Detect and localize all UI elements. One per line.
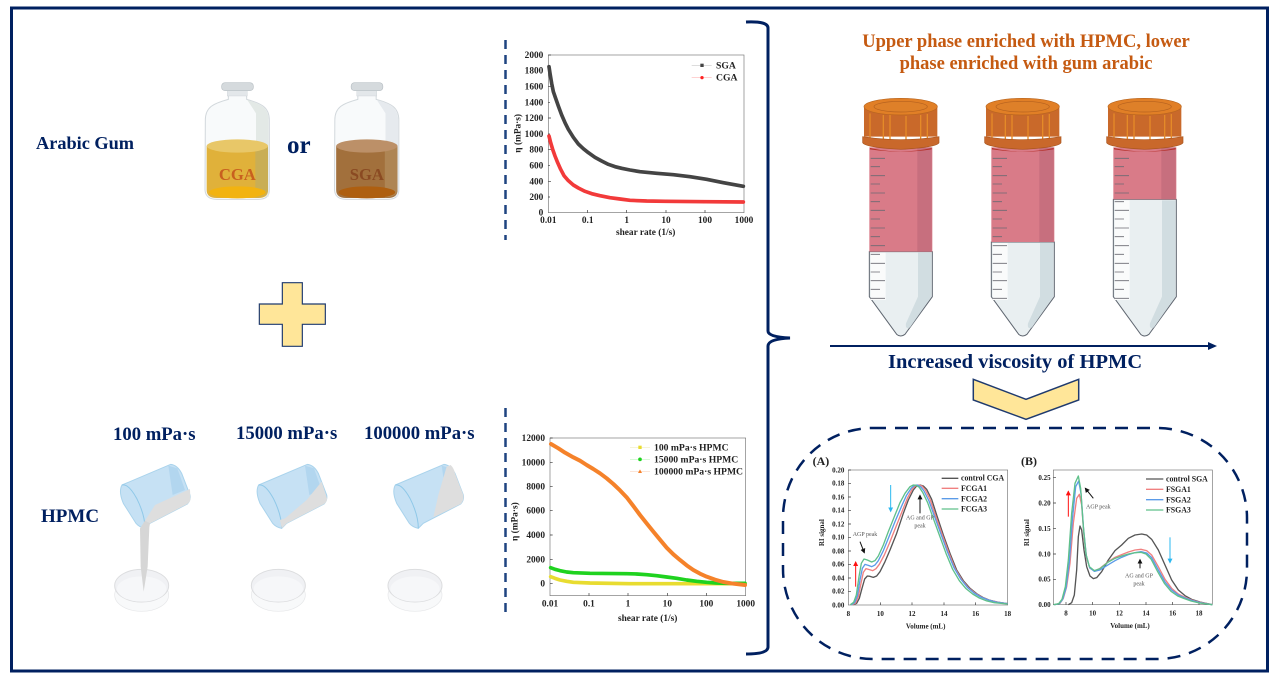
dashed divider top <box>504 40 507 240</box>
icon: CGA bottle <box>205 83 269 199</box>
chart B: SGA RI signal: control SGA <box>1166 475 1208 484</box>
chart A: CGA RI signal: FCGA1 <box>961 484 987 493</box>
chart B: SGA RI signal: RI signal <box>1023 519 1031 546</box>
chart A: CGA RI signal <box>813 454 1012 630</box>
chart: viscosity of HPMC grades: 12000 <box>522 434 545 444</box>
icon: tube 2 <box>985 98 1061 336</box>
icon: plus sign <box>259 283 325 346</box>
chart: viscosity of SGA and CGA: 1000 <box>525 130 544 140</box>
chart B: SGA RI signal: 0.20 <box>1038 499 1051 507</box>
chart: viscosity of HPMC grades: 15000 mPa·s HPMC <box>654 454 738 465</box>
chart: viscosity of SGA and CGA: 1 <box>624 216 629 226</box>
chart A: CGA RI signal: 12 <box>909 610 916 618</box>
dashed divider bottom <box>504 408 507 615</box>
chart B: SGA RI signal: AGP peak <box>1086 504 1111 510</box>
chart A: CGA RI signal: 0.14 <box>832 507 845 515</box>
chart B: SGA RI signal: (B) <box>1021 454 1037 468</box>
icon: pouring beaker and dish, 100 mPa·s <box>115 464 190 611</box>
chart A: CGA RI signal: RI signal <box>818 519 826 546</box>
chart: viscosity of HPMC grades <box>509 434 755 624</box>
chart: viscosity of HPMC grades: 100 mPa·s HPMC <box>654 442 729 453</box>
icon: CGA bottle: CGA <box>219 165 256 184</box>
chart: viscosity of HPMC grades: 0.1 <box>583 599 595 609</box>
chart: viscosity of SGA and CGA <box>513 51 754 238</box>
label: 100 mPa·s: 100 mPa·s <box>113 424 196 445</box>
chart: viscosity of HPMC grades: 0 <box>540 579 545 589</box>
chart: viscosity of SGA and CGA: 100 <box>698 216 712 226</box>
icon: pouring beaker and dish, 100000 mPa·s <box>388 464 464 611</box>
chart: viscosity of SGA and CGA: 200 <box>529 193 544 203</box>
chart B: SGA RI signal: 14 <box>1143 609 1150 617</box>
chart: viscosity of SGA and CGA: 1200 <box>525 114 544 124</box>
chart: viscosity of HPMC grades: 1 <box>626 599 631 609</box>
icon: down chevron <box>973 379 1079 419</box>
chart A: CGA RI signal: FCGA2 <box>961 494 987 503</box>
heading: phase composition: phase enriched with gum arabic <box>900 54 1152 74</box>
chart A: CGA RI signal: peak <box>914 524 926 530</box>
label: 100000 mPa·s: 100000 mPa·s <box>364 423 475 444</box>
chart B: SGA RI signal: 10 <box>1089 609 1097 617</box>
chart B: SGA RI signal: AG and GP <box>1125 573 1154 579</box>
chart: viscosity of SGA and CGA: 400 <box>529 177 544 187</box>
chart: viscosity of HPMC grades: 10 <box>663 599 672 609</box>
chart: viscosity of SGA and CGA: 0.01 <box>540 216 557 226</box>
chart B: SGA RI signal <box>1021 454 1212 630</box>
chart A: CGA RI signal: 0.08 <box>832 547 845 555</box>
chart B: SGA RI signal: 8 <box>1064 609 1068 617</box>
chart: viscosity of SGA and CGA: η (mPa·s) <box>513 114 524 153</box>
chart: viscosity of HPMC grades: 2000 <box>526 555 545 565</box>
chart: viscosity of SGA and CGA: shear rate (1/s) <box>616 227 675 238</box>
chart: viscosity of HPMC grades: 6000 <box>526 507 545 517</box>
chart: viscosity of HPMC grades: 4000 <box>526 531 545 541</box>
chart B: SGA RI signal: 0.10 <box>1038 550 1051 558</box>
chart A: CGA RI signal: (A) <box>813 454 829 468</box>
chart A: CGA RI signal: 14 <box>941 610 948 618</box>
arrow: increasing viscosity <box>830 342 1217 350</box>
label: Arabic Gum: Arabic Gum <box>36 133 134 153</box>
chart: viscosity of HPMC grades: 100000 mPa·s HPMC <box>654 466 743 477</box>
chart A: CGA RI signal: 16 <box>972 610 980 618</box>
chart A: CGA RI signal: 0.10 <box>832 534 845 542</box>
chart A: CGA RI signal: Volume (mL) <box>906 622 946 630</box>
icon: tube 1 <box>863 98 939 336</box>
chart: viscosity of SGA and CGA: 10 <box>661 216 671 226</box>
chart A: CGA RI signal: 0.04 <box>832 574 845 582</box>
chart B: SGA RI signal: peak <box>1133 581 1145 587</box>
heading: phase composition: Upper phase enriched with HPMC, lower <box>862 32 1190 52</box>
dashed panel outline <box>783 428 1247 659</box>
label: HPMC: HPMC <box>41 506 99 527</box>
chart A: CGA RI signal: 0.00 <box>832 601 845 609</box>
chart: viscosity of SGA and CGA: 0 <box>539 209 544 219</box>
text: or: or <box>287 132 311 159</box>
brace <box>746 22 790 654</box>
chart: viscosity of SGA and CGA: 2000 <box>525 51 544 61</box>
chart: viscosity of SGA and CGA: CGA <box>716 73 737 84</box>
icon: SGA bottle <box>334 83 399 199</box>
chart B: SGA RI signal: 0.15 <box>1038 525 1051 533</box>
chart B: SGA RI signal: FSGA1 <box>1166 485 1191 494</box>
icon: SGA bottle: SGA <box>350 165 384 184</box>
chart: viscosity of SGA and CGA: SGA <box>716 60 736 71</box>
chart: viscosity of HPMC grades: 10000 <box>522 458 545 468</box>
heading: phase composition <box>862 32 1190 74</box>
chart: viscosity of HPMC grades: 0.01 <box>542 599 558 609</box>
chart A: CGA RI signal: 8 <box>847 610 851 618</box>
label: 15000 mPa·s: 15000 mPa·s <box>236 423 337 444</box>
chart: viscosity of SGA and CGA: 1400 <box>525 98 544 108</box>
chart B: SGA RI signal: 18 <box>1196 609 1203 617</box>
chart B: SGA RI signal: 16 <box>1169 609 1177 617</box>
chart: viscosity of SGA and CGA: 1800 <box>525 67 544 77</box>
chart A: CGA RI signal: 0.06 <box>832 561 845 569</box>
chart A: CGA RI signal: AGP peak <box>853 532 877 538</box>
chart A: CGA RI signal: 0.12 <box>832 520 845 528</box>
chart B: SGA RI signal: 0.05 <box>1038 576 1051 584</box>
chart A: CGA RI signal: 0.20 <box>832 466 845 474</box>
chart B: SGA RI signal: 0.25 <box>1038 474 1051 482</box>
chart A: CGA RI signal: 0.16 <box>832 493 845 501</box>
chart: viscosity of SGA and CGA: 0.1 <box>582 216 594 226</box>
chart: viscosity of HPMC grades: 8000 <box>526 483 545 493</box>
chart A: CGA RI signal: 0.18 <box>832 480 845 488</box>
chart A: CGA RI signal: AG and GP <box>906 515 935 521</box>
chart A: CGA RI signal: 0.02 <box>832 588 845 596</box>
text: Increased viscosity of HPMC: Increased viscosity of HPMC <box>888 351 1142 373</box>
chart A: CGA RI signal: control CGA <box>961 474 1004 483</box>
chart A: CGA RI signal: FCGA3 <box>961 505 987 514</box>
chart A: CGA RI signal: 18 <box>1004 610 1012 618</box>
chart B: SGA RI signal: FSGA3 <box>1166 506 1191 515</box>
chart: viscosity of HPMC grades: shear rate (1/s) <box>618 613 677 624</box>
chart B: SGA RI signal: 12 <box>1116 609 1123 617</box>
chart A: CGA RI signal: 10 <box>877 610 884 618</box>
chart: viscosity of SGA and CGA: 1600 <box>525 83 544 93</box>
chart B: SGA RI signal: Volume (mL) <box>1110 622 1150 630</box>
chart: viscosity of HPMC grades: η (mPa·s) <box>509 502 520 541</box>
icon: tube 3 <box>1107 98 1183 336</box>
chart: viscosity of SGA and CGA: 800 <box>529 146 544 156</box>
chart: viscosity of SGA and CGA: 1000 <box>735 216 754 226</box>
icon: pouring beaker and dish, 15000 mPa·s <box>251 464 327 611</box>
chart B: SGA RI signal: FSGA2 <box>1166 495 1191 504</box>
chart: viscosity of HPMC grades: 100 <box>699 599 714 609</box>
chart: viscosity of HPMC grades: 1000 <box>736 599 755 609</box>
chart B: SGA RI signal: 0.00 <box>1038 601 1051 609</box>
chart: viscosity of SGA and CGA: 600 <box>529 161 544 171</box>
